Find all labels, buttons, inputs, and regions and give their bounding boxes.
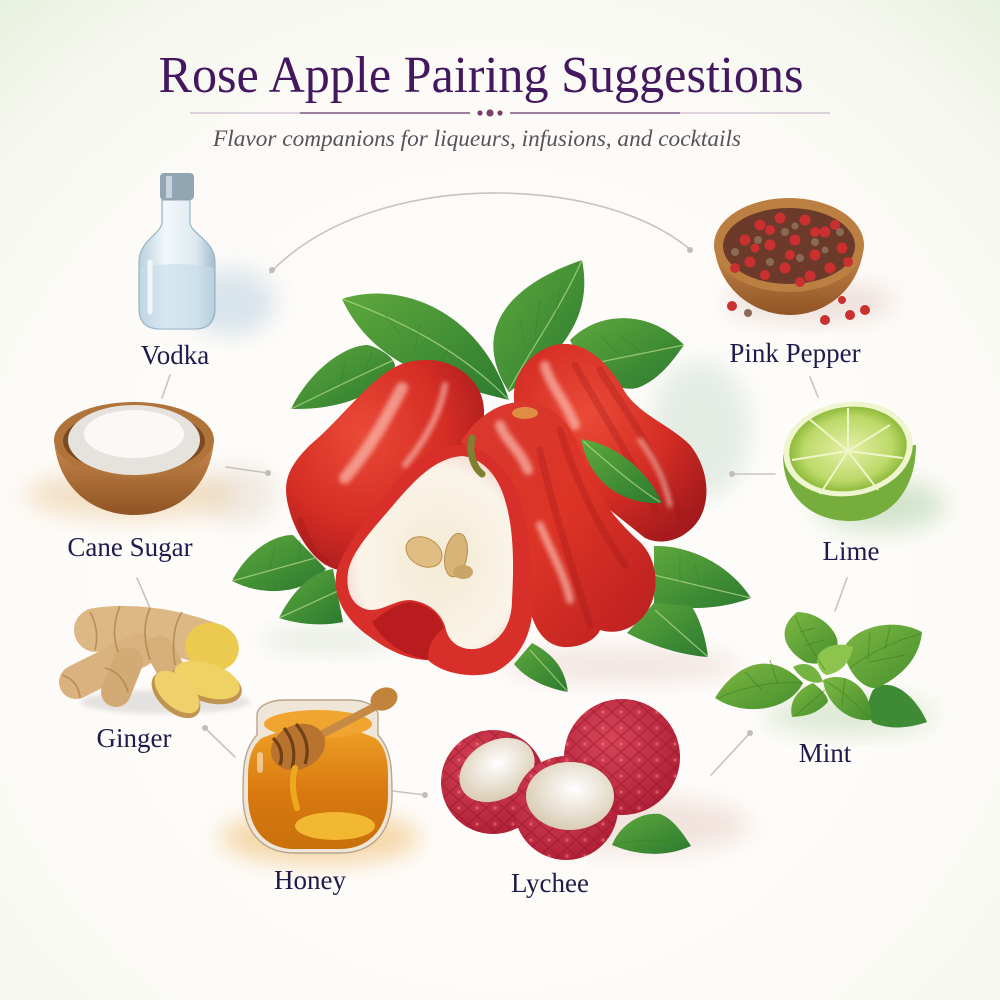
icon: honey jar (220, 683, 420, 864)
cut apple seeds (401, 531, 447, 573)
apple back left (286, 360, 484, 570)
label: Honey: Honey (274, 865, 346, 895)
connector lines (137, 193, 847, 798)
label: Vodka: Vodka (141, 340, 209, 370)
label: Lime: Lime (823, 536, 880, 566)
label: Cane Sugar: Cane Sugar (67, 532, 193, 562)
icon: lime (777, 393, 945, 531)
label: Mint: Mint (799, 738, 852, 768)
title divider ornament (190, 109, 830, 117)
label: Pink Pepper: Pink Pepper (729, 338, 861, 368)
subtitle: Flavor companions for liqueurs, infusions, and cocktails (212, 126, 741, 152)
leaf on apple (581, 439, 662, 503)
icon: ginger (62, 606, 250, 727)
icon: vodka bottle (139, 173, 270, 331)
apple middle (461, 402, 656, 647)
cut apple flesh (347, 456, 513, 649)
icon: pink pepper bowl (714, 198, 895, 325)
apple back right (514, 344, 706, 542)
label: Ginger: Ginger (97, 723, 171, 753)
icon: lychee (441, 699, 750, 860)
cut apple base (372, 602, 444, 660)
cut apple half (336, 445, 532, 675)
apple stem dimple (512, 407, 538, 419)
icon: cane sugar bowl (25, 402, 235, 519)
icon: mint (715, 612, 935, 735)
cut apple stem (471, 438, 482, 474)
label: Lychee: Lychee (511, 868, 589, 898)
leaves behind (232, 260, 751, 692)
illustration: rose apples with leaves (232, 260, 751, 692)
title: Rose Apple Pairing Suggestions (158, 47, 804, 104)
